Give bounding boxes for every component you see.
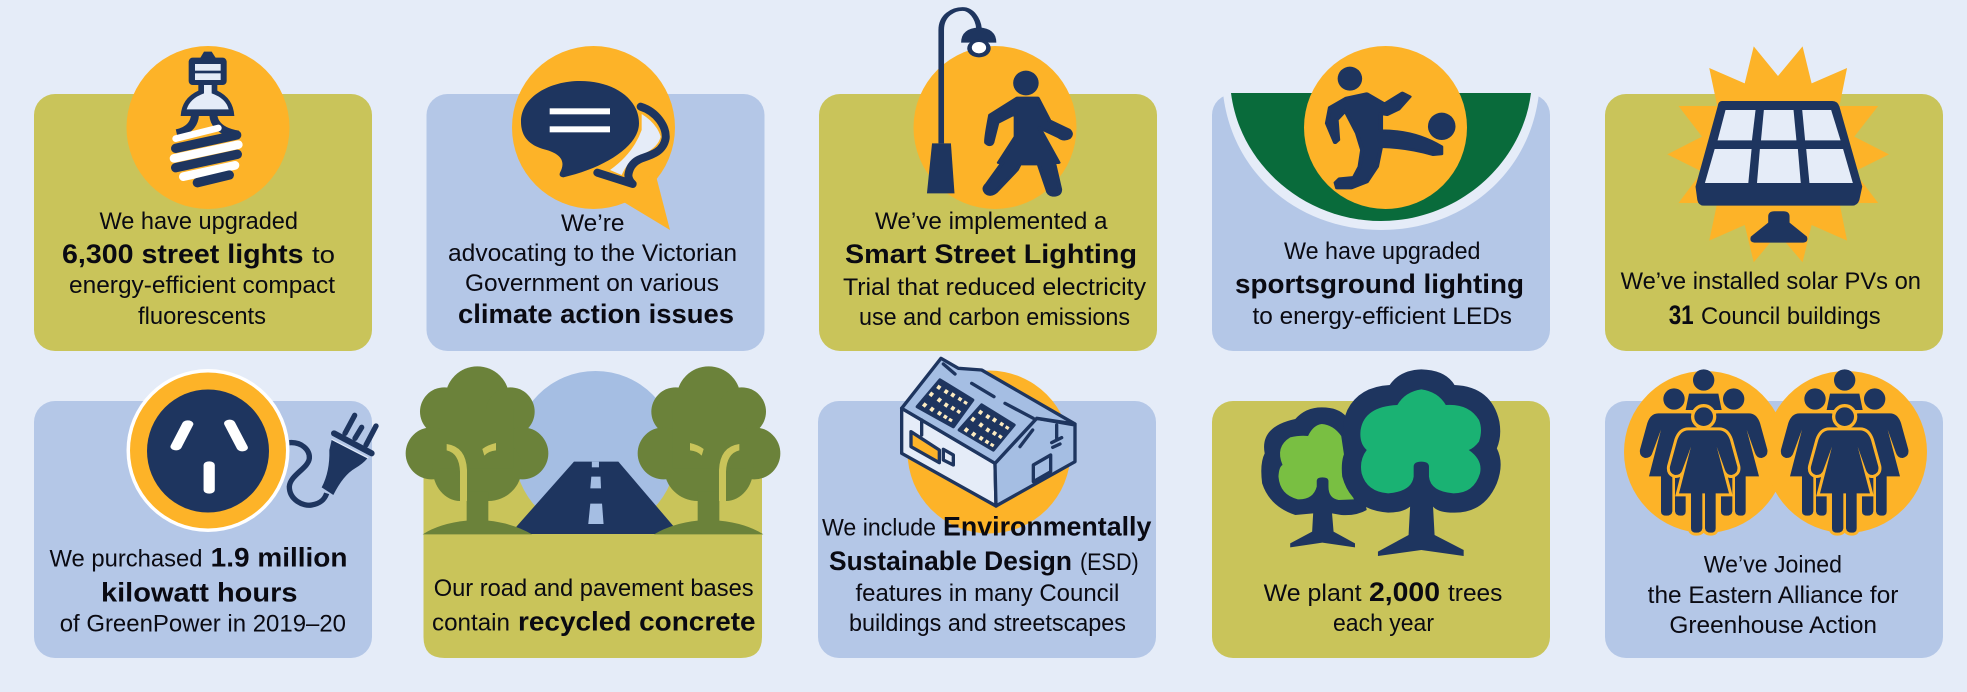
text: tree planting bbox=[1264, 577, 1502, 637]
icon: solar panel with sunburst bbox=[1667, 46, 1889, 262]
icon: street lamp and pedestrian bbox=[927, 9, 1071, 195]
text: recycled concrete: contain bbox=[432, 610, 510, 637]
light arc bbox=[1223, 93, 1539, 230]
text: smart street lighting: Smart Street Lighting bbox=[845, 239, 1137, 269]
text: street lights: energy-efficient compact bbox=[69, 272, 335, 299]
card background bbox=[819, 94, 1157, 351]
card background bbox=[426, 94, 764, 351]
card background bbox=[34, 401, 372, 658]
card background bbox=[34, 94, 372, 351]
text: street lights: We have upgraded bbox=[100, 208, 298, 235]
card background bbox=[424, 478, 762, 658]
text: sustainable design bbox=[822, 512, 1151, 637]
panel: advocacy bbox=[426, 46, 764, 351]
text: GreenPower bbox=[50, 543, 348, 638]
text: street lights: 6,300 street lights bbox=[62, 239, 304, 269]
card background bbox=[1605, 401, 1943, 658]
text: Eastern Alliance: Greenhouse Action bbox=[1669, 612, 1877, 639]
text: sustainable design: (ESD) bbox=[1080, 549, 1139, 576]
text: GreenPower: We purchased bbox=[50, 546, 202, 573]
icon: two trees bbox=[1261, 369, 1501, 556]
text: recycled concrete: Our road and pavement bases bbox=[434, 575, 754, 602]
text: sustainable design: We include bbox=[822, 515, 936, 542]
panel: Eastern Alliance bbox=[1605, 369, 1943, 658]
icon: power socket bbox=[126, 369, 290, 532]
text: Eastern Alliance: We’ve Joined bbox=[1704, 552, 1842, 579]
panel: street lights bbox=[34, 46, 372, 351]
orange circle bbox=[1304, 46, 1467, 209]
text: sustainable design: Environmentally bbox=[943, 512, 1151, 542]
text: solar PVs: 31 bbox=[1669, 300, 1694, 330]
text: GreenPower: of GreenPower in 2019–20 bbox=[60, 611, 346, 638]
card background bbox=[1212, 94, 1550, 351]
text: smart street lighting: Trial that reduced electricity bbox=[843, 274, 1146, 301]
orange circles bbox=[1624, 371, 1927, 533]
text: tree planting: trees bbox=[1448, 580, 1502, 607]
text: street lights: to bbox=[312, 242, 335, 269]
text: Eastern Alliance bbox=[1648, 552, 1898, 639]
orange circle bbox=[914, 46, 1076, 209]
text: sportsground lighting: We have upgraded bbox=[1284, 238, 1480, 265]
panel: GreenPower bbox=[34, 369, 376, 658]
text: sportsground lighting: to energy-efficient LEDs bbox=[1252, 303, 1512, 330]
text: recycled concrete bbox=[432, 575, 756, 637]
text: advocacy bbox=[448, 210, 737, 329]
text: GreenPower: kilowatt hours bbox=[101, 578, 298, 608]
panel: recycled concrete bbox=[406, 366, 780, 658]
icon: groups of people bbox=[1640, 369, 1908, 533]
text: solar PVs bbox=[1621, 268, 1921, 330]
text: solar PVs: Council buildings bbox=[1701, 303, 1881, 330]
card background bbox=[1605, 94, 1943, 351]
text: street lights bbox=[62, 208, 335, 330]
text: smart street lighting: We’ve implemented a bbox=[875, 208, 1108, 235]
text: advocacy: advocating to the Victorian bbox=[448, 240, 737, 267]
green field bbox=[1231, 93, 1531, 221]
icon: house with solar panels bbox=[902, 358, 1075, 506]
text: tree planting: each year bbox=[1333, 610, 1434, 637]
text: recycled concrete: recycled concrete bbox=[518, 607, 756, 637]
panel: sportsground lighting bbox=[1212, 46, 1550, 351]
text: sportsground lighting: sportsground lighting bbox=[1235, 269, 1524, 299]
orange circle bbox=[126, 46, 290, 209]
icon: road and trees bbox=[406, 366, 780, 534]
card background bbox=[1212, 401, 1550, 658]
text: sportsground lighting bbox=[1235, 238, 1524, 330]
text: solar PVs: We’ve installed solar PVs on bbox=[1621, 268, 1921, 295]
orange speech bubble bbox=[512, 46, 675, 230]
text: advocacy: We’re bbox=[561, 210, 624, 237]
text: sustainable design: Sustainable Design bbox=[829, 546, 1072, 576]
icon: speech bubbles bbox=[521, 81, 666, 184]
panel: solar PVs bbox=[1605, 46, 1943, 351]
icon: compact fluorescent bulb bbox=[174, 52, 238, 183]
text: sustainable design: buildings and streetscapes bbox=[849, 610, 1126, 637]
text: GreenPower: 1.9 million bbox=[211, 543, 348, 573]
text: Eastern Alliance: the Eastern Alliance for bbox=[1648, 582, 1898, 609]
panel: smart street lighting bbox=[819, 9, 1157, 351]
text: sustainable design: features in many Council bbox=[856, 580, 1119, 607]
panel: tree planting bbox=[1212, 369, 1550, 658]
text: street lights: fluorescents bbox=[138, 303, 266, 330]
text: tree planting: 2,000 bbox=[1369, 577, 1440, 607]
text: advocacy: Government on various bbox=[465, 270, 719, 297]
text: tree planting: We plant bbox=[1264, 580, 1362, 607]
text: advocacy: climate action issues bbox=[458, 299, 734, 329]
sky circle bbox=[514, 371, 676, 533]
panel: sustainable design bbox=[818, 358, 1156, 658]
icon: soccer player bbox=[1327, 67, 1456, 188]
text: smart street lighting bbox=[843, 208, 1146, 331]
orange circle bbox=[908, 370, 1070, 534]
icon: electric plug and cord bbox=[289, 415, 376, 505]
card background bbox=[818, 401, 1156, 658]
text: smart street lighting: use and carbon emissions bbox=[859, 304, 1130, 331]
